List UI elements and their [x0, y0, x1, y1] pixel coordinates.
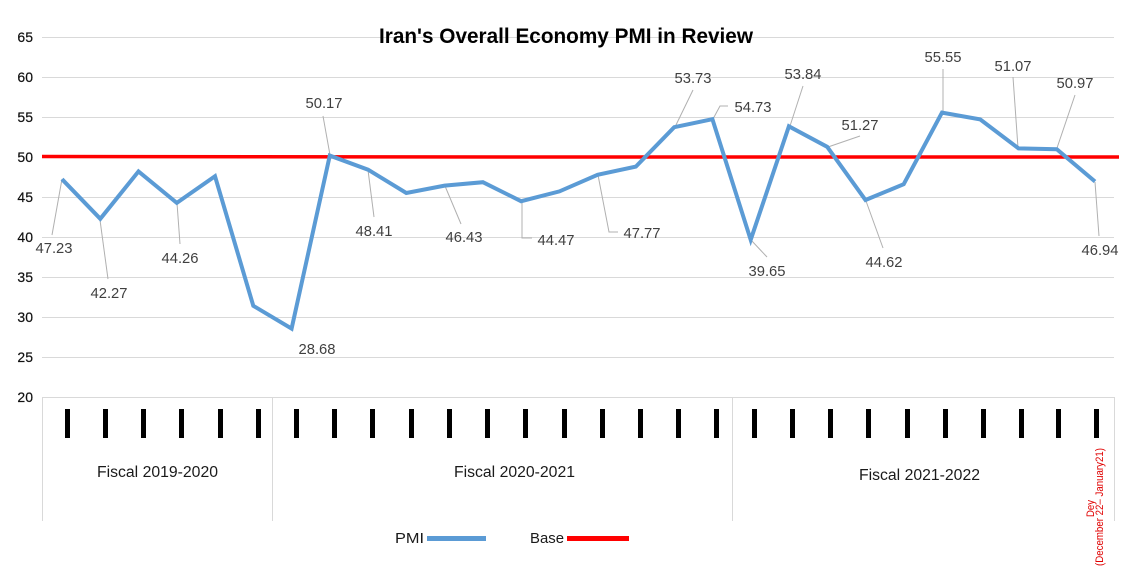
- leader lines: [52, 69, 1099, 279]
- data labels: 46.43: [446, 229, 482, 246]
- data labels: 55.55: [924, 49, 962, 66]
- data labels: 50.97: [1056, 75, 1094, 92]
- data labels: 42.27: [90, 285, 128, 302]
- data labels: 54.73: [734, 99, 772, 116]
- y axis labels: 30: [17, 309, 33, 325]
- data labels: 51.07: [994, 58, 1032, 75]
- y axis labels: 50: [17, 149, 33, 165]
- data labels: 28.68: [298, 341, 336, 358]
- data labels: 51.27: [842, 117, 878, 134]
- fiscal year labels: Fiscal 2020-2021: [454, 464, 575, 481]
- y axis labels: 45: [17, 189, 33, 205]
- data labels: [36, 49, 1118, 358]
- data labels: 46.94: [1082, 242, 1118, 259]
- last month label: Dey: Dey: [1085, 500, 1097, 517]
- last month label: Dey: (December 22– January21): [1094, 448, 1106, 566]
- data labels: 39.65: [748, 263, 786, 280]
- data labels: 44.47: [538, 232, 574, 249]
- legend: [395, 530, 629, 547]
- y axis labels: [17, 29, 33, 405]
- y axis labels: 60: [17, 69, 33, 85]
- data labels: 44.26: [162, 250, 198, 267]
- data labels: 47.77: [624, 225, 660, 242]
- last month label: Dey: [1085, 448, 1106, 566]
- fiscal year labels: Fiscal 2019-2020: [97, 464, 218, 481]
- title: Iran's Overall Economy PMI in Review: [379, 25, 754, 48]
- fiscal year labels: Fiscal 2021-2022: [859, 467, 980, 484]
- base line series: [42, 155, 1119, 159]
- legend: Base: [530, 530, 564, 547]
- y axis labels: 25: [17, 349, 33, 365]
- data labels: 50.17: [306, 95, 342, 112]
- y axis labels: 35: [17, 269, 33, 285]
- y axis labels: 65: [17, 29, 33, 45]
- legend: PMI: [395, 530, 424, 547]
- y axis labels: 40: [17, 229, 33, 245]
- y axis labels: 55: [17, 109, 33, 125]
- y axis labels: 20: [17, 389, 33, 405]
- data labels: 48.41: [356, 223, 392, 240]
- data labels: 47.23: [36, 240, 72, 257]
- PMI line series: [62, 113, 1095, 329]
- data labels: 44.62: [866, 254, 902, 271]
- fiscal year labels: [97, 464, 980, 484]
- data labels: 53.73: [674, 70, 712, 87]
- data labels: 53.84: [784, 66, 822, 83]
- x axis month ticks: [65, 409, 1099, 438]
